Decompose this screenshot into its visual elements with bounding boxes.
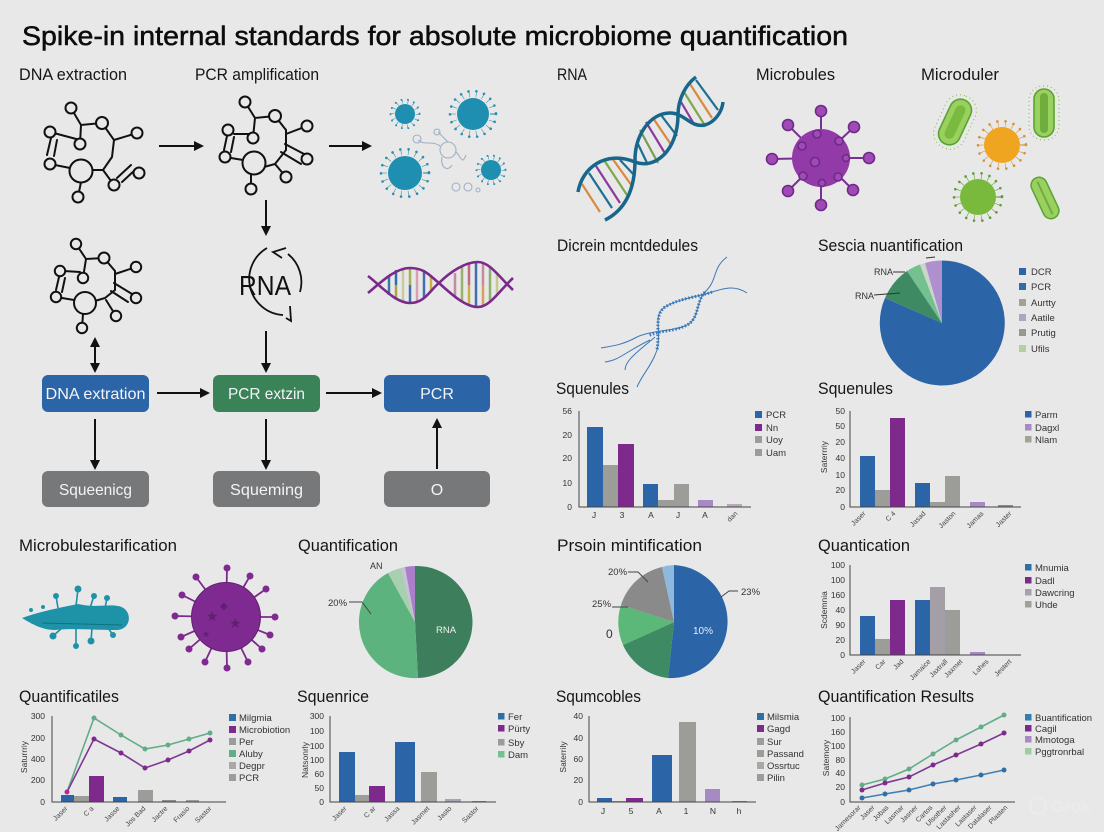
bar chart: Jaser [850,510,868,528]
bar chart: C 4 [885,510,897,523]
line chart: 100 [831,713,845,723]
panel: Quantification Results line chart [818,688,1092,832]
arrow: molecule 2 to RNA [261,200,271,236]
icon: green virus [954,173,1002,221]
bar chart: Saterrily [558,741,568,773]
heading: PCR amplification: PCR amplification [195,66,319,84]
legend: Buantification [1035,713,1092,724]
bar chart: 20 [836,485,845,495]
combo chart [19,711,226,828]
legend: Per [239,737,254,748]
bar chart: 40 [574,711,583,721]
legend: Fer [508,712,522,723]
legend: Pilin [767,773,785,784]
legend: Nlam [1035,435,1057,446]
bar chart: 50 [836,406,845,416]
box: O [384,471,490,507]
line chart: 100 [831,741,845,751]
pie chart: 25% [592,599,612,610]
pie chart: RNA [855,291,874,301]
heading: Microbules: Microbules [756,66,835,84]
line chart: Lastasher [936,804,963,831]
heading: Quantificatiles: Quantificatiles [19,688,119,706]
line chart: 20 [836,782,845,792]
combo chart: 200 [31,733,45,743]
legend [498,712,530,761]
legend: Pggtronrbal [1035,747,1084,758]
panel: Squmcobles bar chart [556,688,804,816]
legend: Gagd [767,724,790,735]
line chart: Lasmar [884,804,906,826]
box: sequencing 2 [213,471,320,507]
bar chart: N [710,806,716,816]
bar chart: 100 [310,755,324,765]
bar chart: 90 [836,620,845,630]
bar chart: J [601,806,605,816]
icon: purple spiky virus [172,564,278,672]
legend [229,713,290,784]
combo chart: 300 [31,711,45,721]
line chart: Jaser [859,804,877,822]
bar chart: 20 [563,453,572,463]
panel: Microduler [921,66,1062,221]
bar chart: 20 [574,775,583,785]
bar chart: Jamaice [909,658,932,682]
legend: Prutig [1031,328,1056,339]
combo chart: 0 [40,797,45,807]
bar chart: Jasmet [411,805,431,826]
bar chart [558,711,756,816]
bar chart: Jestert [994,658,1013,678]
bar chart: C ar [363,805,378,820]
legend: Uoy [766,435,783,446]
pie chart: 20% [608,567,628,578]
bar chart [819,406,1021,530]
pie chart [592,565,761,678]
legend [1025,563,1075,611]
heading: Prsoin mintification: Prsoin mintification [557,537,702,555]
legend: PCR [1031,282,1051,293]
box: PCR [384,375,490,412]
legend: PCR [239,773,259,784]
legend: Ossrtuc [767,761,800,772]
icon: purple spiky virus: ★ [229,615,242,631]
bar chart: Jaster [995,510,1014,529]
line chart: Datalaser [967,804,994,831]
combo chart: C a [83,805,95,818]
bar chart: Jasad [909,510,927,529]
bar chart [819,560,1021,682]
bar chart [563,406,751,524]
bar chart: 20 [563,430,572,440]
legend [1025,410,1059,446]
bar chart: 40 [574,733,583,743]
legend [755,410,786,459]
panel: Proin quantification pie [557,537,761,678]
pie chart: 0 [606,627,613,641]
bar chart: Jassa [384,805,401,823]
box: PCR extraction [213,375,320,412]
bar chart: A [656,806,662,816]
bar chart: 100 [310,726,324,736]
heading: Microbulestarification: Microbulestarification [19,537,177,555]
bar chart: 10 [563,478,572,488]
bar chart: J [676,510,680,520]
legend: Microbiotion [239,725,290,736]
box: sequencing 2: Squeming [230,482,303,499]
panel: Dicrein molecules [557,237,747,387]
watermark: Grok [1051,797,1091,816]
title: Spike-in internal standards for absolute microbiome quantification [22,21,848,51]
arrow: RNA to PCR extraction [261,331,271,373]
legend: Mnumia [1035,563,1070,574]
bar chart: Natsonrly [300,741,310,778]
bar chart: 20 [836,437,845,447]
heading: Quantification: Quantification [298,537,398,555]
bar chart: 1 [684,806,689,816]
bar chart: Lahes [972,658,991,677]
icon: blue strands [601,257,747,387]
bar chart: Saterrriy [819,440,829,473]
legend: Ufils [1031,344,1050,355]
combo chart: Jactre [151,805,169,824]
bar chart: 10 [836,470,845,480]
panel: Microbules [756,66,874,210]
legend: Pürty [508,724,530,735]
bar chart: Jasto [437,805,453,822]
bar chart: dan [726,510,739,524]
line chart: 80 [836,755,845,765]
bar chart: Scdemnia [819,591,829,629]
legend: Sby [508,738,525,749]
pie chart: 20% [328,598,348,609]
icon: green rod bacterium 1 [929,90,981,154]
box: DNA extraction: DNA extration [46,386,146,403]
line chart: 40 [836,768,845,778]
bar chart: 20 [836,635,845,645]
line chart [821,712,1015,832]
bar chart: 0 [567,502,572,512]
icon: molecule 1 [44,102,144,202]
bar chart: 56 [563,406,572,416]
legend [1025,713,1092,758]
combo chart: 200 [31,775,45,785]
combo chart: Saturrriy [19,740,29,773]
combo chart: Jasse [104,805,121,823]
bar chart: Jaxtrall [929,658,950,679]
combo chart: 400 [31,754,45,764]
legend: Aatile [1031,313,1055,324]
legend: DCR [1031,267,1052,278]
legend [1019,267,1056,355]
arrow: molecule 3 to DNA extraction (double) [90,337,100,373]
box: PCR extraction: PCR extzin [228,386,305,403]
icon: purple spiky virus: ★ [206,608,219,624]
combo chart: Sastor [194,805,214,825]
pie chart: RNA [436,625,457,636]
icon: RNA cycle: RNA [239,270,291,301]
panel: Squenrice bar chart [297,688,530,826]
pie chart [328,561,473,678]
bar chart: 5 [629,806,634,816]
combo chart: Jaser [52,805,70,823]
bar chart: Jaser [331,805,349,823]
legend: Milsmia [767,712,800,723]
icon: purple spiky virus: ★ [202,629,210,639]
bar chart: Jad [892,658,905,671]
heading: Squenrice: Squenrice [297,688,369,706]
icon: teal bacterium [22,586,129,649]
icon: green rod bacterium 2 [1029,86,1059,140]
bar chart: 60 [315,769,324,779]
pie chart: AN [370,561,383,571]
bar chart: 300 [310,711,324,721]
legend: PCR [766,410,786,421]
legend: Uam [766,448,786,459]
panel: workflow diagram [19,66,513,507]
panel: Sescia quantification [818,237,1056,385]
icon: molecule 3 [51,239,141,333]
bar chart [300,711,496,826]
line chart: 160 [831,727,845,737]
icon: green rod bacterium 3 [1028,175,1062,221]
line chart: Jamesorar [834,804,863,832]
panel: RNA helix [557,66,723,220]
combo chart: Frasio [173,805,191,824]
line chart: Jasner [900,804,920,824]
icon: RNA cycle [239,248,301,321]
line chart: Ulsother [925,804,949,828]
legend: Nn [766,423,778,434]
box: sequencing 1: Squeenicg [59,482,132,499]
arrow: PCR extraction to sequencing [261,419,271,470]
box: PCR: PCR [420,386,454,403]
bar chart: 60 [574,754,583,764]
bar chart: Sastor [461,805,481,825]
bar chart: Jaxmet [944,658,964,679]
heading: Squenules: Squenules [556,380,629,398]
panel: Quantificatiles combo chart [19,688,290,828]
line chart: Satemory [821,739,831,776]
icon: DNA double helix [578,77,723,220]
panel: Microbule star [19,537,278,672]
arrow: PCR extraction to PCR [326,388,382,398]
panel: Squenules bar chart B [818,380,1059,530]
heading: Dicrein mcntdedules: Dicrein mcntdedules [557,237,698,255]
icon: purple spiky virus: ◆ [220,601,228,612]
line chart: 0 [840,797,845,807]
bar chart: 0 [319,797,324,807]
legend: Aurtty [1031,298,1056,309]
pie chart: RNA [874,267,893,277]
box: sequencing 1 [42,471,149,507]
bar chart: Jaser [850,658,868,676]
bar chart: J [592,510,596,520]
bar chart: Jamas [966,510,986,530]
heading: RNA: RNA [557,66,587,84]
bar chart: A [702,510,708,520]
line chart: Plasten [988,804,1009,826]
panel: Squenules bar chart A [556,380,786,524]
legend: Dagxl [1035,423,1059,434]
arrow: DNA extraction to PCR extraction [157,388,210,398]
bar chart: 40 [836,605,845,615]
icon: purple virus [766,106,874,210]
bar chart: Jaston [938,510,957,530]
arrow: O to PCR [432,418,442,469]
box: DNA extraction [42,375,149,412]
legend: Dadl [1035,576,1055,587]
icon: molecule 2 [220,96,312,194]
legend: Sur [767,737,782,748]
legend: Passand [767,749,804,760]
panel: Quantication bar chart [818,537,1075,682]
arrow: molecule 1 to molecule 2 [159,141,204,151]
heading: Squenules: Squenules [818,380,893,398]
pie chart [855,257,1005,385]
bar chart: 160 [831,590,845,600]
legend: Dawcring [1035,588,1075,599]
pie chart: 23% [741,587,761,598]
bar chart: 100 [310,741,324,751]
legend: Cagil [1035,724,1057,735]
bar chart: 0 [840,502,845,512]
legend: Parm [1035,410,1058,421]
arrow: DNA extraction to sequencing [90,419,100,470]
heading: Squmcobles: Squmcobles [556,688,641,706]
bar chart: 0 [840,650,845,660]
bar chart: 100 [831,575,845,585]
icon: orange virus [978,121,1026,169]
legend: Dam [508,750,528,761]
bar chart: 50 [836,421,845,431]
bar chart: A [648,510,654,520]
heading: Microduler: Microduler [921,66,1000,84]
bar chart: Car [874,658,888,671]
heading: DNA extraction: DNA extraction [19,66,127,84]
arrow: molecule 2 to viruses [329,141,372,151]
bar chart: 50 [315,783,324,793]
watermark [1030,797,1091,816]
legend [757,712,804,784]
pie chart: 10% [693,626,713,637]
panel: Quantification pie [298,537,473,678]
line chart: Cartos [915,804,935,824]
bar chart: 40 [836,453,845,463]
line chart: Jobas [872,804,891,823]
bar chart: 0 [578,797,583,807]
combo chart: Jos Bad [125,805,147,828]
legend: Mmotoga [1035,735,1075,746]
bar chart: 3 [620,510,625,520]
line chart: Lastaser [954,804,979,828]
legend: Uhde [1035,600,1058,611]
bar chart: 100 [831,560,845,570]
icon: horizontal DNA helix [368,262,513,307]
heading: Quantification Results: Quantification Results [818,688,974,706]
heading: Sescia nuantification: Sescia nuantification [818,237,963,255]
box: O: O [431,482,443,499]
bar chart: h [737,806,742,816]
legend: Aluby [239,749,263,760]
legend: Degpr [239,761,265,772]
legend: Milgmia [239,713,272,724]
heading: Quantication: Quantication [818,537,910,555]
icon: teal viruses with faint molecule [381,91,506,197]
